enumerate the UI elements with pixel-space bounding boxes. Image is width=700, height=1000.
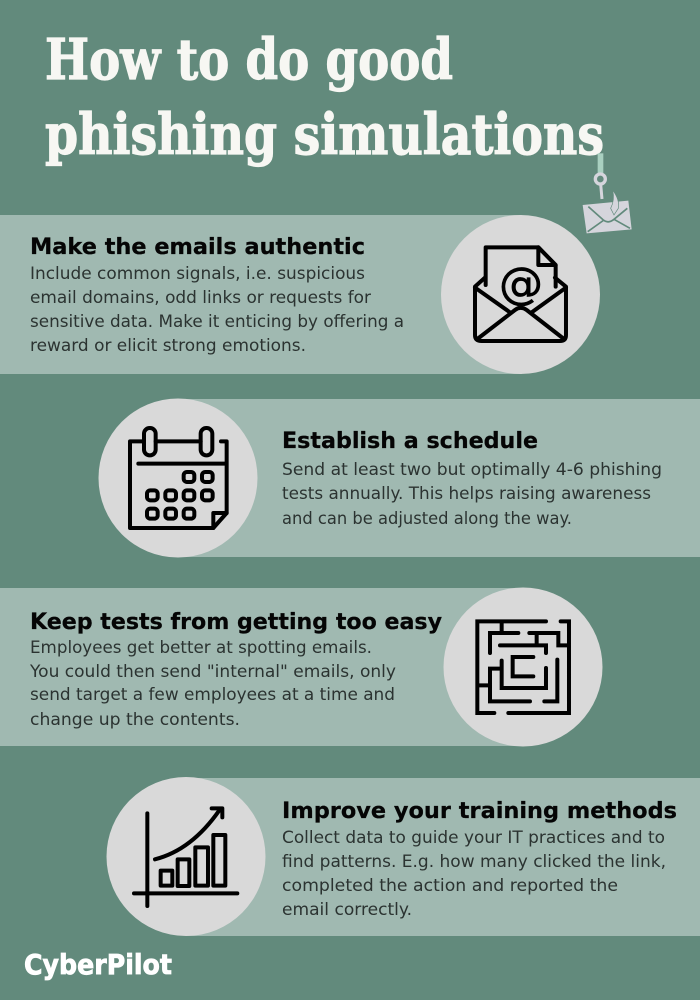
text block: training [282,828,666,920]
icon: open envelope with at sign: @ [499,258,543,309]
icon: phishing hook with envelope [583,153,632,233]
text block: schedule: and can be adjusted along the way. [282,509,572,529]
text block: harder tests [29,638,396,730]
text block: authentic emails [30,264,404,356]
heading: make the emails authentic: Make the emails authentic [30,235,365,260]
heading: keep tests from getting too easy: Keep tests from getting too easy [30,610,442,635]
panel: establish a schedule [178,399,700,557]
text block: authentic emails: email domains, odd links or requests for [30,288,371,308]
text block: training: find patterns. E.g. how many clicked the link, [282,852,666,872]
text block: training: completed the action and reported the [282,876,618,896]
panel: keep tests from getting too easy [0,588,525,746]
text block: authentic emails: sensitive data. Make it enticing by offering a [30,312,404,332]
icon: open envelope with at sign [441,215,600,374]
text block: harder tests: You could then send "internal" emails, only [29,662,396,682]
text block: authentic emails: Include common signals, i.e. suspicious [30,264,365,284]
text block: harder tests: send target a few employees at a time and [30,685,395,705]
logo: CyberPilot: CyberPilot [24,948,172,981]
text block: training: Collect data to guide your IT practices and to [282,828,665,848]
heading: improve your training methods: Improve your training methods [282,799,677,824]
text block: harder tests: Employees get better at spotting emails. [30,638,372,658]
text block: schedule: Send at least two but optimally 4-6 phishing [282,460,662,480]
text block: training: email correctly. [282,900,412,920]
title: How to do good [45,27,453,93]
text block: harder tests: change up the contents. [30,710,240,730]
heading: establish a schedule: Establish a schedule [282,429,538,454]
panel: improve your training methods [186,778,700,936]
icon: calendar [98,398,258,558]
panel: make the emails authentic [0,215,522,374]
text block: schedule: tests annually. This helps raising awareness [282,484,651,504]
text block: authentic emails: reward or elicit strong emotions. [30,336,306,356]
title [45,27,604,168]
icon: growth chart [106,777,266,936]
icon: maze [444,588,602,746]
text block: schedule [282,460,662,529]
title: phishing simulations [45,102,604,168]
